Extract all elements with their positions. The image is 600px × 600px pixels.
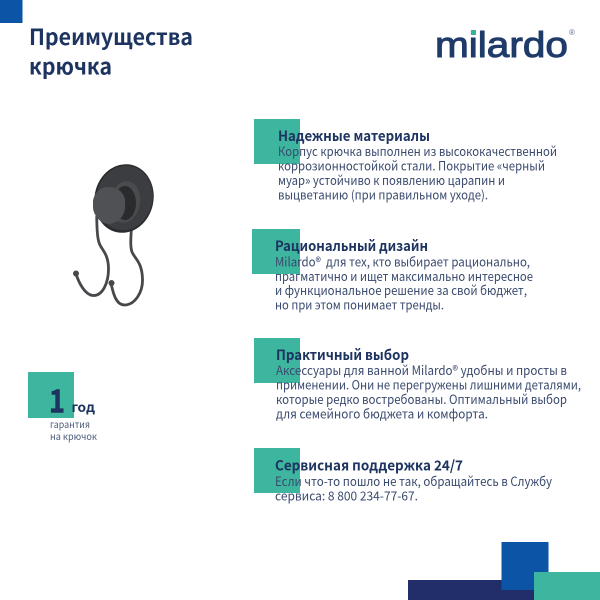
suction plate [88, 159, 160, 238]
corner decoration: overlapping squares [408, 542, 600, 600]
feature: Сервисная поддержка 24/7 [254, 448, 552, 504]
logo: milardo: ® [569, 28, 575, 37]
feature: Практичный выбор: для семейного бюджета и комфорта. [276, 404, 488, 422]
feature: Надежные материалы: Надежные материалы [278, 126, 430, 146]
feature: Практичный выбор: Практичный выбор [276, 345, 409, 365]
feature: Надежные материалы: коррозионностойкой стали. Покрытие «черный [278, 156, 545, 174]
feature: Рациональный дизайн [252, 229, 533, 314]
feature: Рациональный дизайн: прагматично и ищет максимально интересное [275, 266, 533, 285]
warranty stat: 1 год: гарантия [50, 417, 90, 431]
feature: Рациональный дизайн: и функциональное решение за свой бюджет, [275, 280, 527, 299]
feature: Практичный выбор: Аксессуары для ванной Milardo® удобны и просты в [276, 360, 567, 379]
corner accent: blue square [0, 0, 22, 23]
warranty stat: 1 год: 1 [49, 376, 65, 422]
feature: Надежные материалы: выцветанию (при правильном уходе). [278, 184, 488, 204]
feature: Рациональный дизайн: Рациональный дизайн [275, 236, 428, 256]
inner ring [107, 179, 143, 225]
hook wires [76, 217, 108, 296]
feature: Рациональный дизайн: но при этом понимает тренды. [275, 294, 444, 314]
feature: Надежные материалы [254, 119, 557, 204]
feature: Сервисная поддержка 24/7: Сервисная поддержка 24/7 [275, 456, 463, 476]
feature: Надежные материалы: Корпус крючка выполнен из высококачественной [278, 141, 557, 160]
logo: milardo: milardo [435, 24, 568, 65]
feature: Сервисная поддержка 24/7: сервиса: 8 800 234-77-67. [275, 486, 418, 504]
knob [93, 187, 125, 224]
title: Преимущества [29, 20, 193, 52]
warranty stat: 1 год [28, 372, 98, 443]
feature: Рациональный дизайн: Milardo® для тех, кто выбирает рационально, [275, 252, 530, 270]
product image: black double hook [73, 159, 160, 305]
feature: Практичный выбор: которые редко востребованы. Оптимальный выбор [276, 389, 567, 408]
warranty stat: 1 год: на крючок [50, 429, 98, 443]
warranty stat: 1 год: год [72, 397, 96, 416]
title [29, 20, 193, 82]
title: крючка [29, 50, 112, 82]
feature: Надежные материалы: муар» устойчиво к появлению царапин и [278, 170, 505, 189]
feature: Практичный выбор [254, 338, 581, 422]
feature: Сервисная поддержка 24/7: Если что-то пошло не так, обращайтесь в Службу [275, 471, 552, 490]
